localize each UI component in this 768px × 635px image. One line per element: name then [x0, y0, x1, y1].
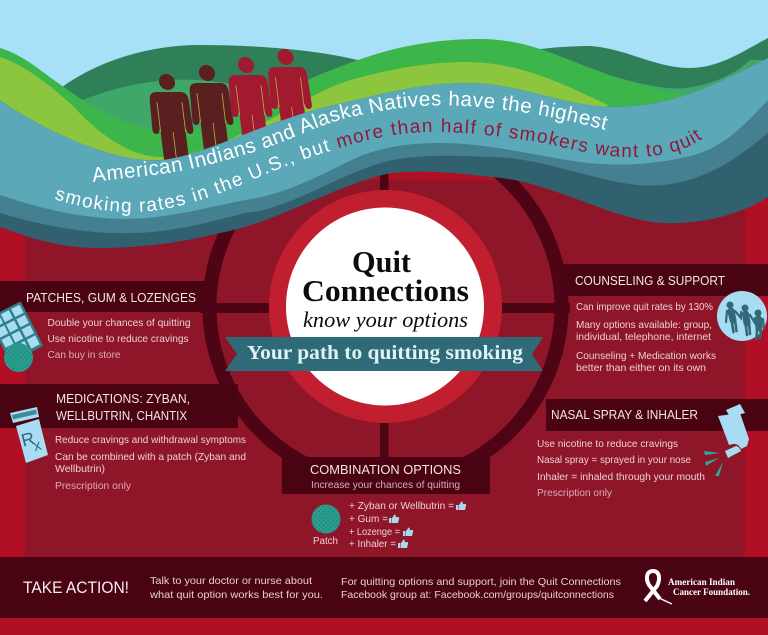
- list: combinations: [349, 500, 454, 550]
- icon: prescription bottle: x: [31, 436, 44, 455]
- footer: take action: [0, 557, 768, 618]
- title: Quit Connections: [302, 244, 469, 308]
- icon: prescription bottle: R: [19, 428, 37, 451]
- text: nasal spray details: Use nicotine to reduce cravings: [537, 438, 678, 450]
- heading: take action: TAKE ACTION!: [23, 578, 129, 597]
- title: Quit Connections: Connections: [302, 273, 469, 308]
- text: medications details: Can be combined with a patch (Zyban and: [55, 451, 246, 463]
- panel: patches, gum and lozenges: [0, 281, 206, 372]
- heading: combination: COMBINATION OPTIONS: [310, 462, 461, 477]
- icons: thumbs up: [389, 502, 466, 548]
- text: patches benefits: [48, 317, 191, 361]
- icon: round patch: [4, 343, 33, 372]
- central title badge: [225, 190, 543, 423]
- heading: patches: PATCHES, GUM & LOZENGES: [26, 290, 196, 305]
- text: patches benefits: Use nicotine to reduce cravings: [48, 333, 188, 345]
- label: patch: Patch: [313, 535, 338, 547]
- text: medications details: [55, 434, 246, 492]
- text: nasal spray details: Inhaler = inhaled through your mouth: [537, 471, 705, 483]
- text: counseling details: [576, 301, 716, 374]
- badge: red ring and white circle: [269, 190, 502, 423]
- heading: counseling: COUNSELING & SUPPORT: [575, 273, 725, 288]
- person 1: [146, 74, 199, 177]
- logo: American Indian Cancer Foundation: [668, 578, 750, 598]
- bright green wave: [0, 39, 700, 175]
- text: facebook group: Facebook group at: Facebook.com/groups/quitconnections: [341, 589, 614, 601]
- text: talk to your doctor: [149, 575, 323, 601]
- text: facebook group: For quitting options and support, join the Quit Connections: [341, 576, 621, 588]
- heading: nasal spray: NASAL SPRAY & INHALER: [551, 407, 698, 422]
- list: combinations: + Lozenge =: [349, 526, 400, 538]
- heading band: nasal spray: [546, 399, 768, 431]
- teal banner wave: [0, 58, 768, 248]
- text: nasal spray details: [537, 438, 705, 499]
- panel: combination options: [282, 457, 490, 550]
- heading: medications: [56, 391, 190, 423]
- text: patches benefits: Can buy in store: [48, 349, 121, 361]
- text: medications details: Prescription only: [55, 480, 132, 492]
- heading band: counseling: [560, 264, 768, 296]
- text: talk to your doctor: what quit option works best for you.: [149, 589, 323, 601]
- background hills: [62, 38, 768, 170]
- sky: [0, 0, 768, 160]
- banner headline: American Indians and Alaska Natives have the highest: [92, 90, 608, 182]
- text: counseling details: Many options available: group,: [576, 319, 712, 331]
- icon: prescription bottle: [10, 407, 48, 463]
- text: counseling details: better than either on its own: [576, 362, 706, 374]
- list: combinations: + Gum =: [349, 513, 388, 525]
- heading band: medications: [0, 384, 238, 428]
- person 4: [264, 49, 318, 152]
- banner headline: smoking rates in the U.S., but more than half of smokers want to quit: [55, 118, 702, 216]
- light green wave: [0, 57, 620, 180]
- heading: medications: MEDICATIONS: ZYBAN,: [56, 391, 190, 406]
- panel: counseling and support: [560, 264, 768, 374]
- logo: ribbon: [645, 571, 672, 604]
- text: nasal spray details: Prescription only: [537, 487, 613, 499]
- heading: medications: WELLBUTRIN, CHANTIX: [56, 408, 187, 423]
- text: talk to your doctor: Talk to your doctor or nurse about: [150, 575, 312, 587]
- subheading: combination: Increase your chances of quitting: [311, 479, 460, 491]
- list: combinations: + Zyban or Wellbutrin =: [349, 500, 454, 512]
- text: nasal spray details: Nasal spray = sprayed in your nose: [537, 454, 691, 466]
- icon: patch sheet: [0, 301, 43, 363]
- person 3: [225, 57, 278, 160]
- text: medications details: Reduce cravings and withdrawal symptoms: [55, 434, 246, 446]
- list: combinations: + Inhaler =: [349, 538, 396, 550]
- ribbon: your path: Your path to quitting smoking: [247, 342, 523, 364]
- panel: medications: [0, 384, 246, 492]
- tagline: know your options: know your options: [303, 307, 468, 332]
- ribbon: your path: [225, 337, 543, 371]
- panel: nasal spray and inhaler: [537, 399, 768, 499]
- text: medications details: Wellbutrin): [55, 463, 105, 475]
- text: counseling details: individual, telephone, internet: [576, 331, 711, 343]
- icon: group of people: [717, 291, 767, 341]
- text: facebook group: [341, 576, 621, 601]
- path ring and crossroads: [200, 131, 570, 483]
- title: Quit Connections: Quit: [352, 244, 412, 279]
- icon: patch: [312, 504, 340, 534]
- heading band: combination: [282, 457, 490, 494]
- logo: American Indian Cancer Foundation: Cancer Foundation.: [673, 588, 750, 598]
- text: counseling details: Counseling + Medication works: [576, 350, 716, 362]
- icon: inhaler: [704, 404, 749, 476]
- people figures: [146, 49, 318, 177]
- logo: American Indian Cancer Foundation: American Indian: [668, 578, 736, 588]
- text: patches benefits: Double your chances of quitting: [48, 317, 191, 329]
- text: counseling details: Can improve quit rates by 130%: [576, 301, 713, 313]
- person 2: [186, 65, 239, 168]
- heading band: patches: [0, 281, 206, 312]
